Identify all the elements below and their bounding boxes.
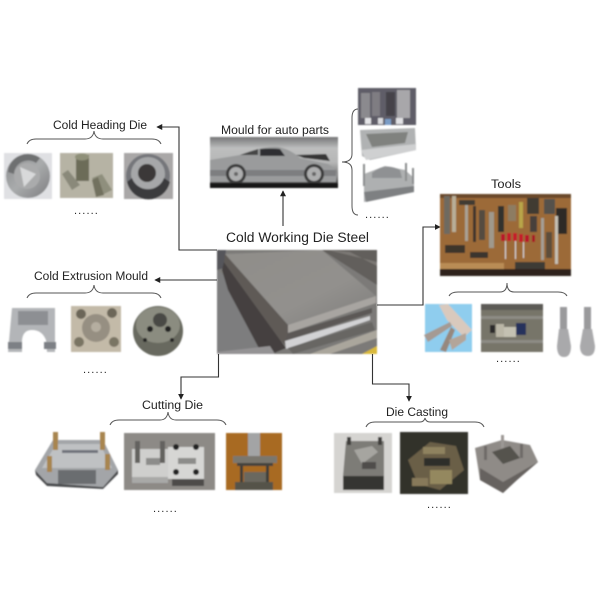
more dots: ...... [496, 353, 521, 365]
arrow: to cold heading die [157, 127, 217, 250]
heading: Die Casting [386, 405, 448, 419]
section: cold heading die [4, 118, 173, 217]
photo: cylinders [60, 153, 113, 198]
photo: 3D render mould [475, 435, 538, 493]
photo: two mould halves [124, 433, 215, 490]
main title: Cold Working Die Steel [226, 229, 369, 245]
brace [27, 285, 161, 298]
photo: punch bits [557, 307, 595, 357]
section: die casting [334, 405, 538, 511]
arrow: to tools [377, 227, 440, 305]
section: cold extrusion mould [8, 269, 183, 376]
photo: ring [124, 153, 173, 199]
arrow: to mould for auto parts [282, 191, 284, 226]
photo: square flange [71, 306, 121, 352]
photo: tool wall [440, 194, 571, 276]
heading: Cutting Die [142, 398, 203, 412]
heading: Cold Extrusion Mould [34, 269, 148, 283]
photo: bumper mould [360, 128, 416, 160]
photo: die casting mould [334, 433, 392, 493]
arrow: to cold extrusion mould [155, 279, 217, 281]
more dots: ...... [365, 209, 390, 221]
photo: stacked steel plates [217, 250, 377, 354]
more dots: ...... [83, 364, 108, 376]
brace [342, 109, 358, 215]
photo: perforated brackets [424, 304, 472, 352]
photo: round housing [133, 306, 183, 356]
photo: bent plate [8, 308, 56, 352]
photo: dark mould [400, 432, 468, 494]
brace [27, 131, 161, 144]
photo: disc [4, 153, 52, 199]
photo: die with brass pillars [35, 432, 118, 489]
brace [110, 412, 226, 425]
arrow: to die casting [372, 354, 409, 401]
heading: Tools [491, 177, 521, 191]
photo: press die on orange [226, 433, 282, 490]
photo: car [210, 137, 338, 188]
section: tools [424, 177, 595, 365]
photo: mould block [481, 304, 543, 352]
section: cutting die [35, 398, 282, 515]
brace [366, 418, 484, 427]
heading: Mould for auto parts [221, 123, 329, 137]
more dots: ...... [153, 503, 178, 515]
brace [449, 283, 567, 296]
heading: Cold Heading Die [53, 118, 147, 132]
section: mould for auto parts [210, 88, 416, 221]
arrow: to cutting die [181, 354, 218, 399]
photo: mould parts [358, 88, 416, 125]
more dots: ...... [427, 499, 452, 511]
photo: core mould [363, 163, 414, 202]
more dots: ...... [74, 205, 99, 217]
